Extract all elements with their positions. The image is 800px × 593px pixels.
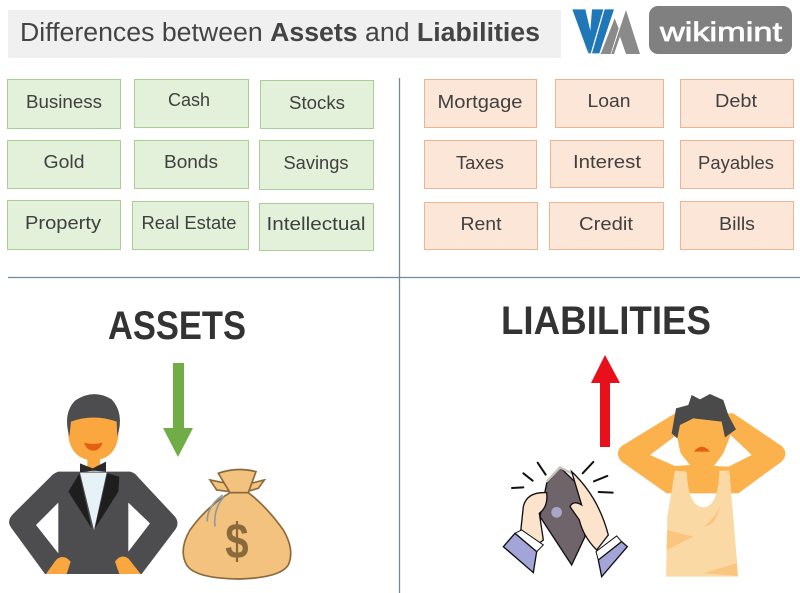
icon: stressed person <box>618 394 785 577</box>
item: Cash <box>134 80 248 128</box>
item: Taxes: Taxes <box>456 152 504 173</box>
heading: liabilities: LIABILITIES <box>501 299 711 343</box>
item: Rent <box>424 202 538 250</box>
title: Differences between Assets and Liabilities <box>20 19 540 47</box>
arrow: liabilities up <box>591 355 620 447</box>
item: Real Estate <box>132 202 248 250</box>
logo: wikimint <box>649 6 792 54</box>
item: Gold <box>8 140 120 188</box>
item: Stocks <box>260 80 374 128</box>
item: Credit <box>550 202 664 250</box>
item: Gold: Gold <box>44 151 84 172</box>
icon: businessman <box>9 394 177 574</box>
item: Mortgage <box>424 80 536 128</box>
item: Bills: Bills <box>719 213 755 234</box>
item: Loan: Loan <box>588 90 630 111</box>
icon: empty wallet in hands <box>503 462 627 577</box>
item: Cash: Cash <box>168 89 210 110</box>
item: Business <box>8 80 120 128</box>
item: Rent: Rent <box>460 213 502 234</box>
item: Intellectual: Intellectual <box>266 213 366 234</box>
icon: money bag <box>183 470 291 579</box>
item: Property: Property <box>25 212 102 233</box>
item: Mortgage: Mortgage <box>438 91 522 112</box>
item: Bonds: Bonds <box>164 151 218 172</box>
arrow: assets down <box>163 363 193 457</box>
item: Bills <box>680 202 794 250</box>
item: Interest <box>550 140 664 188</box>
item: Credit: Credit <box>579 213 633 234</box>
dollar sign: $ <box>225 514 249 570</box>
item: Stocks: Stocks <box>289 92 345 113</box>
item: Loan <box>556 80 664 128</box>
item: Real Estate: Real Estate <box>142 212 236 233</box>
item: Interest: Interest <box>573 151 641 172</box>
item: Bonds <box>134 140 248 188</box>
item: Property <box>8 200 120 250</box>
item: Savings: Savings <box>284 152 348 173</box>
item: Intellectual <box>260 204 374 250</box>
item: Debt <box>680 80 794 128</box>
title <box>8 10 561 58</box>
item: Business: Business <box>26 91 102 112</box>
logo: VM <box>572 9 640 54</box>
panel: liability categories <box>424 80 794 250</box>
panel: asset categories <box>8 80 374 250</box>
heading: assets: ASSETS <box>108 304 246 348</box>
item: Savings <box>260 140 374 190</box>
item: Taxes <box>424 140 536 188</box>
item: Debt: Debt <box>715 90 757 111</box>
logo: wikimint: wikimint <box>659 17 783 47</box>
item: Payables: Payables <box>698 152 774 173</box>
item: Payables <box>680 140 794 188</box>
